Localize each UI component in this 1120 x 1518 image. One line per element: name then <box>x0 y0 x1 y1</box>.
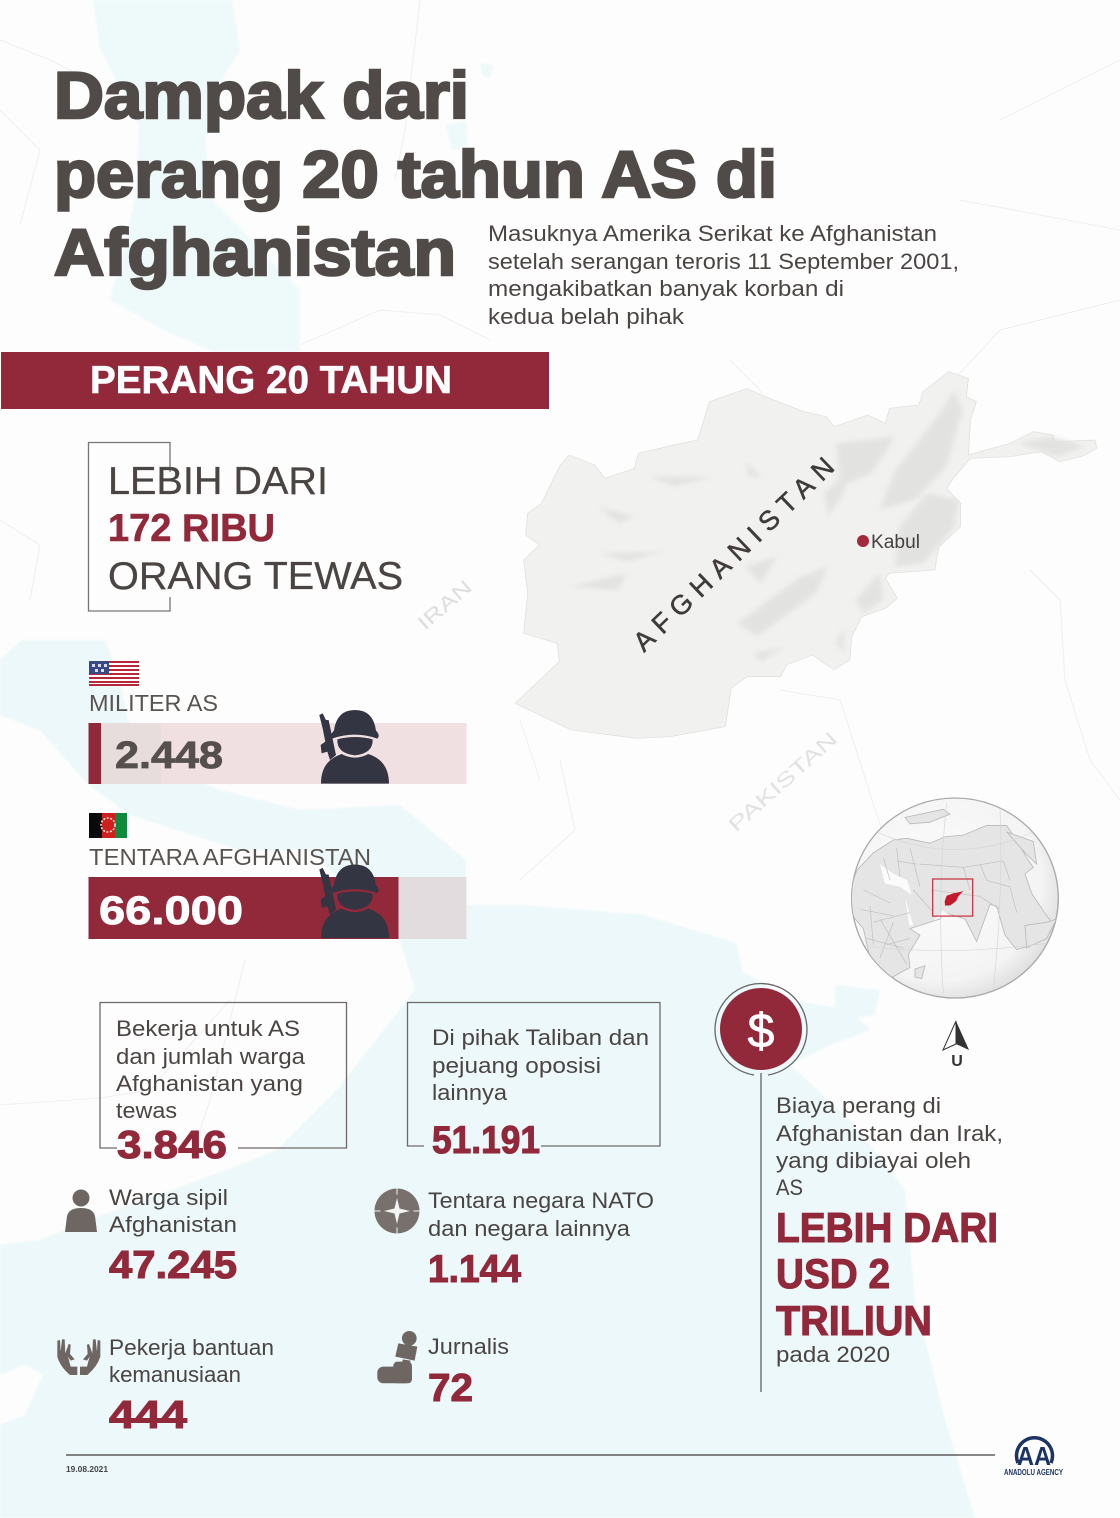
map: Afghanistan <box>515 372 1097 738</box>
panel: working for US: 3.846 <box>117 1124 227 1167</box>
callout: total deaths: LEBIH DARI <box>108 460 328 503</box>
icon: north arrow <box>943 1021 969 1070</box>
title: perang 20 tahun AS di <box>54 137 777 211</box>
panel: Taliban and opposition: Di pihak Taliban dan <box>432 1025 649 1050</box>
icon: NATO compass <box>374 1188 420 1234</box>
panel: working for US: Bekerja untuk AS <box>116 1016 300 1041</box>
label: Tentara Afghanistan: TENTARA AFGHANISTAN <box>89 844 371 870</box>
stat: NATO: 1.144 <box>428 1248 521 1291</box>
gulf of Kutch water <box>835 985 880 1020</box>
bar: Militer AS: 2.448 <box>115 735 223 777</box>
icon: civilian <box>65 1190 97 1232</box>
panel: Taliban and opposition: 51.191 <box>432 1119 540 1162</box>
icon: north arrow: U <box>951 1053 963 1070</box>
panel: working for US: Afghanistan yang <box>116 1071 303 1096</box>
stat: journalists: Jurnalis <box>428 1334 509 1359</box>
panel: Taliban and opposition: lainnya <box>432 1080 508 1105</box>
text: war cost: USD 2 <box>776 1250 890 1297</box>
text: war cost: TRILIUN <box>776 1297 932 1344</box>
panel: Taliban and opposition <box>408 1002 660 1162</box>
icon: US flag <box>89 661 139 686</box>
label: Iran: IRAN <box>414 576 477 635</box>
icon: soldier <box>319 710 389 784</box>
panel: Taliban and opposition: pejuang oposisi <box>432 1053 601 1078</box>
title: Afghanistan <box>54 215 456 289</box>
callout: total deaths: 172 RIBU <box>108 507 275 550</box>
text: war cost: pada 2020 <box>776 1342 890 1367</box>
stat: NATO: Tentara negara NATO <box>428 1188 654 1213</box>
stat: journalists <box>428 1334 509 1410</box>
stat: aid workers: Pekerja bantuan <box>109 1335 274 1360</box>
text: war cost: AS <box>776 1175 803 1200</box>
text: war cost <box>776 1093 1003 1367</box>
stat: civilians: 47.245 <box>109 1244 237 1287</box>
text: war cost: Afghanistan dan Irak, <box>776 1121 1003 1146</box>
intro text: mengakibatkan banyak korban di <box>488 276 844 301</box>
banner: perang 20 tahun: PERANG 20 TAHUN <box>90 359 452 402</box>
logo: Anadolu Agency: AA <box>1017 1441 1051 1471</box>
bar: Militer AS <box>88 723 466 784</box>
bar: Tentara Afghanistan: 66.000 <box>99 889 243 933</box>
logo: Anadolu Agency <box>1004 1438 1064 1477</box>
stat: aid workers: 444 <box>109 1394 187 1437</box>
stat: NATO: dan negara lainnya <box>428 1216 631 1241</box>
panel: working for US: dan jumlah warga <box>116 1044 306 1069</box>
logo: Anadolu Agency: ANADOLU AGENCY <box>1004 1468 1064 1477</box>
intro text <box>488 221 959 329</box>
intro text: setelah serangan teroris 11 September 2001, <box>488 249 959 274</box>
title <box>54 58 777 289</box>
callout: total deaths <box>88 442 403 611</box>
icon: journalist microphone <box>377 1331 417 1383</box>
panel: working for US: tewas <box>116 1098 177 1123</box>
icon: soldier <box>319 864 389 938</box>
icon: helping hands <box>57 1339 100 1375</box>
icon: dollar badge: $ <box>748 1005 774 1058</box>
icon: dollar badge <box>715 984 807 1075</box>
lakes <box>446 63 493 150</box>
icon: Afghanistan flag <box>89 813 127 838</box>
panel: working for US <box>100 1002 346 1167</box>
sea: Caspian <box>93 0 300 352</box>
stat: aid workers: kemanusiaan <box>109 1362 241 1387</box>
intro text: kedua belah pihak <box>488 304 685 329</box>
globe locator <box>850 798 1058 998</box>
footer rule <box>66 1454 995 1456</box>
stat: civilians: Afghanistan <box>109 1212 237 1237</box>
date: 19.08.2021 <box>66 1465 109 1474</box>
text: war cost: yang dibiayai oleh <box>776 1148 971 1173</box>
stat: NATO <box>428 1188 654 1291</box>
map label: Afghanistan: AFGHANISTAN <box>627 452 840 657</box>
text: war cost: LEBIH DARI <box>776 1204 998 1251</box>
text: war cost: Biaya perang di <box>776 1093 941 1118</box>
bar: Tentara Afghanistan <box>88 877 466 939</box>
stat: journalists: 72 <box>428 1367 473 1410</box>
stat: civilians: Warga sipil <box>109 1185 228 1210</box>
callout: total deaths: ORANG TEWAS <box>108 555 403 598</box>
stat: civilians <box>109 1185 237 1287</box>
banner: perang 20 tahun <box>1 352 549 409</box>
stat: aid workers <box>109 1335 274 1437</box>
faint borders <box>0 0 1120 1160</box>
intro text: Masuknya Amerika Serikat ke Afghanistan <box>488 221 937 246</box>
title: Dampak dari <box>54 58 469 132</box>
map marker: Kabul: Kabul <box>871 532 920 553</box>
label: Militer AS: MILITER AS <box>89 690 218 716</box>
connector line <box>760 1073 762 1392</box>
sea: Persian Gulf and Arabian Sea <box>0 640 975 1518</box>
label: Pakistan: PAKISTAN <box>725 728 842 837</box>
hillshade <box>571 390 1085 662</box>
